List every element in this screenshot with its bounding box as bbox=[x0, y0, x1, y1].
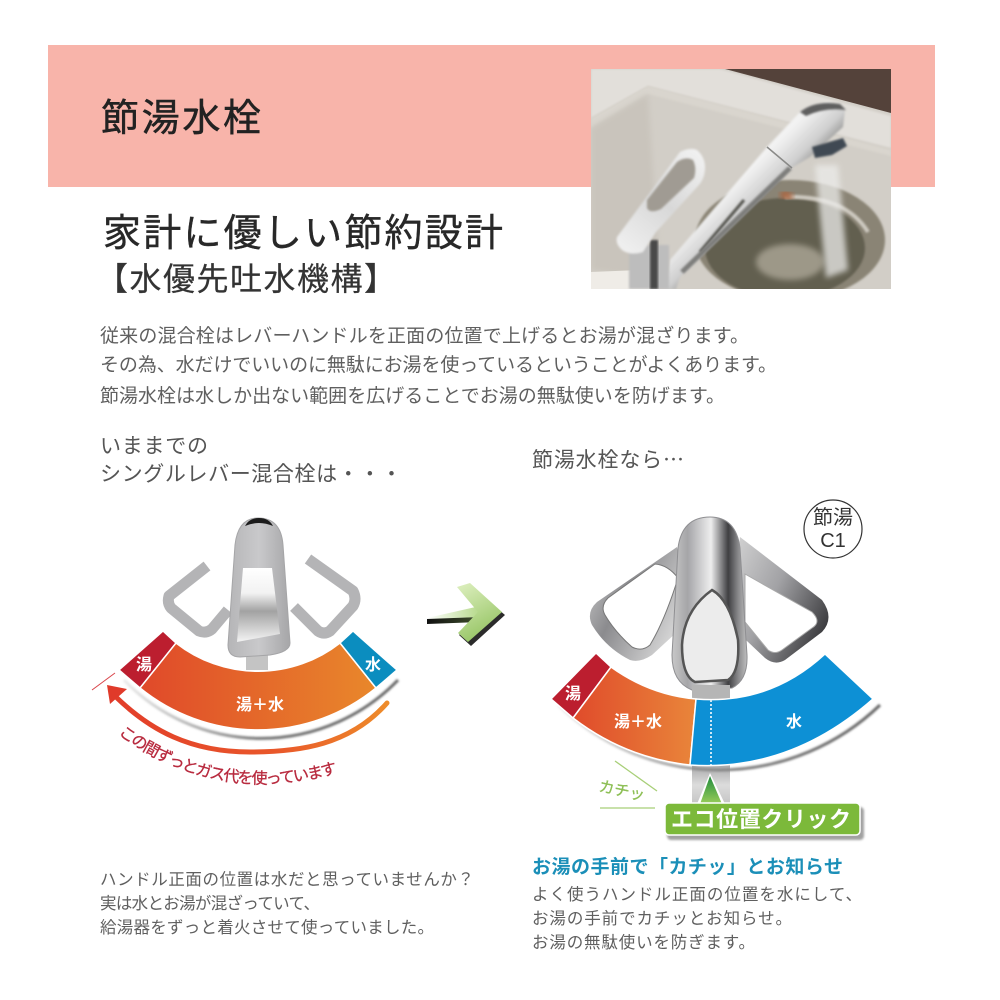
right note: お湯の手前でカチッとお知らせ。 bbox=[532, 909, 792, 928]
intro text: 従来の混合栓はレバーハンドルを正面の位置で上げるとお湯が混ざります。 bbox=[100, 324, 749, 347]
left note: 実は水とお湯が混ざっていて、 bbox=[100, 893, 320, 913]
dial segment: cold bbox=[340, 631, 397, 688]
left dial: 水 bbox=[365, 656, 381, 674]
badge bbox=[804, 500, 862, 558]
left dial: 湯＋水 bbox=[236, 696, 284, 714]
eco position callout bbox=[665, 773, 864, 840]
right faucet stem bbox=[692, 760, 730, 805]
left note: 給湯器をずっと着火させて使っていました。 bbox=[100, 918, 434, 937]
right dial: 湯＋水 bbox=[614, 713, 662, 731]
right faucet handle bbox=[590, 517, 828, 701]
click label bbox=[597, 761, 657, 808]
transition arrow bbox=[427, 583, 505, 646]
right note bbox=[532, 856, 862, 952]
eco click dotted line bbox=[710, 700, 712, 765]
left caption bbox=[100, 435, 402, 486]
left dial bbox=[119, 631, 398, 738]
right note: お湯の無駄使いを防ぎます。 bbox=[532, 933, 755, 952]
dial segment: hot bbox=[119, 631, 176, 688]
photo: faucet over sink bbox=[591, 69, 891, 300]
right caption: 節湯水栓なら… bbox=[532, 444, 684, 474]
dial segment: hot + cold bbox=[573, 667, 696, 765]
right dial bbox=[551, 653, 880, 770]
right note: よく使うハンドル正面の位置を水にして、 bbox=[532, 885, 862, 904]
right note: お湯の手前で「カチッ」とお知らせ bbox=[532, 856, 843, 878]
sweep arrow bbox=[107, 685, 387, 752]
left caption: シングルレバー混合栓は・・・ bbox=[100, 463, 402, 486]
left note: ハンドル正面の位置は水だと思っていませんか？ bbox=[100, 870, 474, 889]
dial segment: hot bbox=[551, 653, 611, 718]
click label: カチッ bbox=[597, 778, 646, 805]
subheading: 家計に優しい節約設計 bbox=[103, 213, 503, 255]
intro text: その為、水だけでいいのに無駄にお湯を使っているということがよくあります。 bbox=[100, 354, 777, 376]
limit line bbox=[92, 673, 115, 690]
intro text bbox=[100, 324, 777, 407]
intro text: 節湯水栓は水しか出ない範囲を広げることでお湯の無駄使いを防げます。 bbox=[100, 385, 725, 407]
right dial: 湯 bbox=[565, 685, 581, 703]
subheading: mechanism: 【水優先吐水機構】 bbox=[96, 261, 396, 297]
left faucet handle bbox=[168, 518, 355, 670]
right dial: 水 bbox=[786, 713, 802, 731]
curved label: この間ずっとガス代を使っています bbox=[121, 727, 334, 786]
left dial: 湯 bbox=[136, 656, 152, 674]
title: 節湯水栓 bbox=[101, 98, 261, 140]
badge: C1 bbox=[820, 530, 846, 552]
left note bbox=[100, 870, 474, 937]
badge: 節湯 bbox=[813, 506, 853, 529]
dial segment: hot + cold bbox=[140, 643, 376, 730]
header band bbox=[48, 45, 935, 187]
left caption: いままでの bbox=[100, 435, 208, 458]
eco position callout: エコ位置クリック bbox=[671, 807, 851, 832]
dial segment: cold bbox=[690, 654, 873, 766]
